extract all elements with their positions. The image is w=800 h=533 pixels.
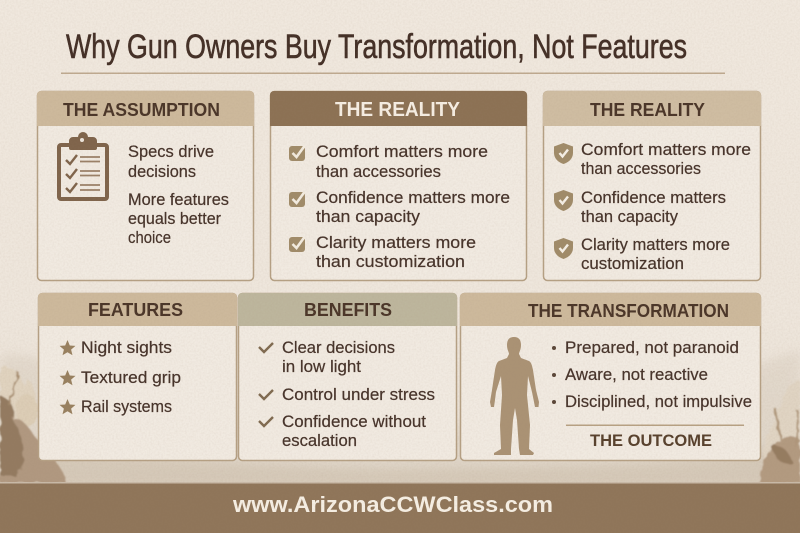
foliage: right corner	[760, 380, 800, 483]
assumption text: choice	[128, 228, 171, 247]
confidence item: Confidence without	[282, 412, 426, 431]
clarity item: Clarity matters more	[581, 235, 730, 254]
icon: shield 1	[554, 143, 573, 164]
header band	[38, 293, 237, 326]
clear decisions item: Clear decisions	[282, 338, 395, 357]
icon: shield 3	[554, 238, 573, 259]
panel: the reality, dark	[270, 91, 527, 280]
clarity item	[581, 235, 730, 273]
title rule	[61, 72, 725, 74]
heading: THE REALITY	[335, 99, 461, 121]
panel: the transformation	[460, 293, 761, 460]
comfort item: Comfort matters more	[581, 140, 751, 159]
confidence item	[581, 188, 726, 226]
item: rail systems: Rail systems	[81, 397, 172, 416]
header band	[543, 91, 761, 126]
icon: checkbox 2	[289, 192, 305, 207]
panel: features	[38, 293, 237, 460]
header band	[238, 293, 457, 326]
comfort item	[581, 140, 751, 178]
comfort item: than accessories	[581, 159, 701, 178]
clear decisions item: in low light	[282, 357, 361, 376]
assumption text: decisions	[128, 162, 196, 181]
comfort item: than accessories	[316, 162, 441, 181]
clarity item: Clarity matters more	[316, 233, 476, 252]
confidence item: Confidence matters	[581, 188, 726, 207]
footer url: www.ArizonaCCWClass.com	[232, 492, 553, 517]
bullet list: Aware, not reactive	[565, 365, 708, 384]
icon: star 1	[60, 340, 76, 355]
assumption text: equals better	[128, 209, 221, 228]
comfort item	[316, 142, 488, 181]
foliage: left corner	[0, 367, 66, 483]
item: night sights: Night sights	[81, 338, 172, 357]
icon: checkbox 1	[289, 146, 305, 161]
icon: star 3	[60, 399, 76, 414]
confidence item: than capacity	[316, 207, 421, 226]
icon: check 1	[259, 343, 273, 352]
assumption text: Specs drive	[128, 142, 214, 161]
icon: check 2	[259, 390, 273, 399]
outcome rule	[566, 424, 744, 426]
confidence item: escalation	[282, 431, 357, 450]
clarity item: customization	[581, 254, 684, 273]
assumption text	[128, 142, 229, 247]
bullet list: Disciplined, not impulsive	[565, 392, 752, 411]
header band	[270, 91, 527, 126]
confidence item	[282, 412, 426, 450]
confidence item: than capacity	[581, 207, 678, 226]
confidence item	[316, 188, 510, 226]
header band	[37, 91, 254, 126]
comfort item: Comfort matters more	[316, 142, 488, 161]
confidence item: Confidence matters more	[316, 188, 510, 207]
clear decisions item	[282, 338, 395, 376]
clarity item: than customization	[316, 252, 465, 271]
panel: benefits	[238, 293, 457, 460]
clarity item	[316, 233, 476, 271]
heading: FEATURES	[88, 300, 183, 320]
panel: the reality, light	[543, 91, 761, 280]
bullet list	[552, 338, 752, 411]
control item: Control under stress	[282, 385, 435, 404]
icon: star 2	[60, 370, 76, 385]
icon: shield 2	[554, 190, 573, 211]
icon: check 3	[259, 417, 273, 426]
heading: THE TRANSFORMATION	[528, 301, 729, 321]
heading: BENEFITS	[304, 300, 392, 320]
item: textured grip: Textured grip	[81, 368, 181, 387]
heading: THE ASSUMPTION	[63, 100, 220, 120]
assumption text: More features	[128, 190, 229, 209]
icon: person silhouette	[490, 337, 539, 455]
panel: the assumption	[37, 91, 254, 280]
icon: checkbox 3	[289, 237, 305, 252]
bullet list: Prepared, not paranoid	[565, 338, 739, 357]
icon: clipboard	[59, 132, 107, 199]
outcome label: THE OUTCOME	[590, 431, 712, 450]
heading: THE REALITY	[590, 100, 705, 120]
footer band	[0, 482, 800, 533]
header band	[460, 293, 761, 326]
